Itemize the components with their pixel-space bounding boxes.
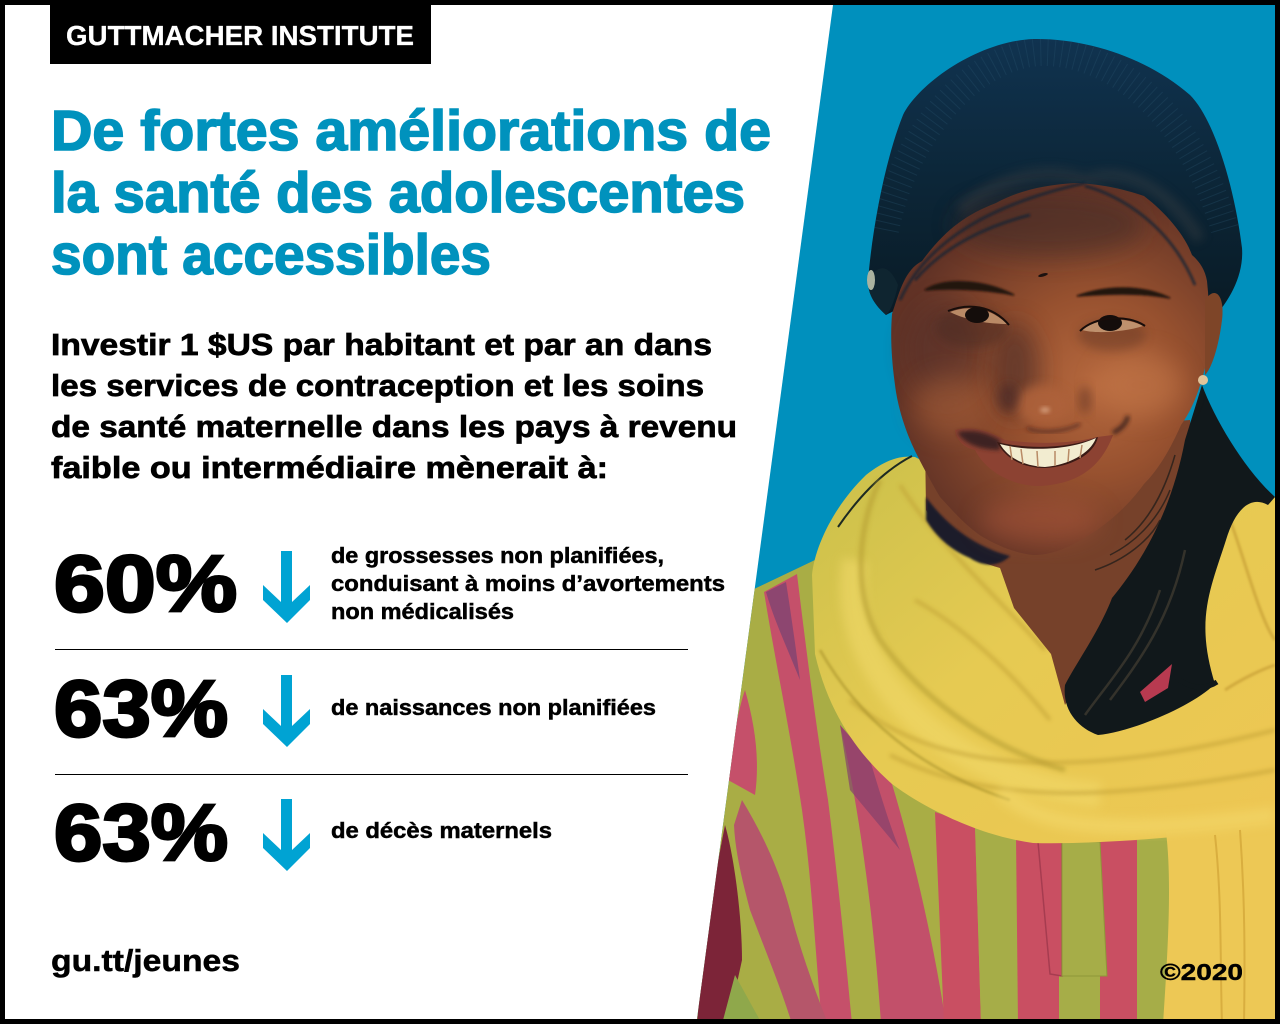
title bbox=[51, 99, 771, 287]
blue background bbox=[690, 0, 1280, 1024]
right ear with earring bbox=[1198, 293, 1223, 385]
stray hair over left temple bbox=[868, 286, 898, 315]
left eye bbox=[936, 307, 1009, 348]
description bbox=[331, 543, 725, 624]
hair ridges bbox=[885, 52, 1225, 240]
yellow scarf bbox=[812, 456, 1275, 1024]
description: de décès maternels bbox=[331, 818, 552, 843]
down arrow bbox=[263, 675, 310, 747]
left hair tie bbox=[867, 270, 875, 290]
copyright: ©2020 bbox=[1160, 959, 1243, 985]
striped shirt bbox=[697, 560, 1169, 1019]
description: non médicalisés bbox=[331, 599, 514, 624]
statistic: 60% unplanned pregnancies bbox=[54, 539, 725, 628]
face shading bbox=[907, 193, 1182, 542]
intro text bbox=[51, 327, 737, 485]
title: sont accessibles bbox=[51, 223, 491, 287]
intro text: faible ou intermédiaire mènerait à: bbox=[51, 450, 608, 485]
hair bbox=[868, 39, 1242, 320]
number 60%: 60% bbox=[54, 539, 237, 628]
statistic: 63% unplanned births bbox=[54, 664, 656, 753]
neck shadow bbox=[926, 497, 1010, 565]
title: De fortes améliorations de bbox=[51, 99, 771, 163]
header tag: Guttmacher Institute bbox=[50, 5, 431, 64]
header tag: Guttmacher Institute: GUTTMACHER INSTITUTE bbox=[66, 20, 414, 51]
right eye bbox=[1078, 315, 1146, 351]
neck bbox=[925, 420, 1200, 705]
down arrow bbox=[263, 551, 310, 623]
long hair strands and curls bbox=[1065, 385, 1275, 735]
intro text: de santé maternelle dans les pays à revenu bbox=[51, 409, 737, 444]
divider bbox=[55, 774, 688, 775]
down arrow bbox=[263, 799, 310, 871]
title: la santé des adolescentes bbox=[51, 161, 745, 225]
source link: gu.tt/jeunes bbox=[51, 943, 240, 978]
number 63%: 63% bbox=[54, 664, 228, 753]
description: de naissances non planifiées bbox=[331, 695, 656, 720]
photo panel: smiling young woman on blue background bbox=[690, 0, 1280, 1024]
left eyebrow bbox=[925, 282, 1014, 295]
intro text: les services de contraception et les soins bbox=[51, 368, 704, 403]
hair wisps across forehead bbox=[900, 183, 1195, 300]
number 63%: 63% bbox=[54, 788, 228, 877]
divider bbox=[55, 649, 688, 650]
description: de grossesses non planifiées, bbox=[331, 543, 664, 568]
statistic: 63% maternal deaths bbox=[54, 788, 552, 877]
scarf hanging end bbox=[1163, 822, 1275, 1024]
intro text: Investir 1 $US par habitant et par an dans bbox=[51, 327, 712, 362]
face bbox=[891, 183, 1209, 555]
bindi bbox=[1038, 273, 1048, 277]
smile bbox=[955, 416, 1128, 486]
description: conduisant à moins d’avortements bbox=[331, 571, 725, 596]
right eyebrow bbox=[1077, 288, 1170, 298]
